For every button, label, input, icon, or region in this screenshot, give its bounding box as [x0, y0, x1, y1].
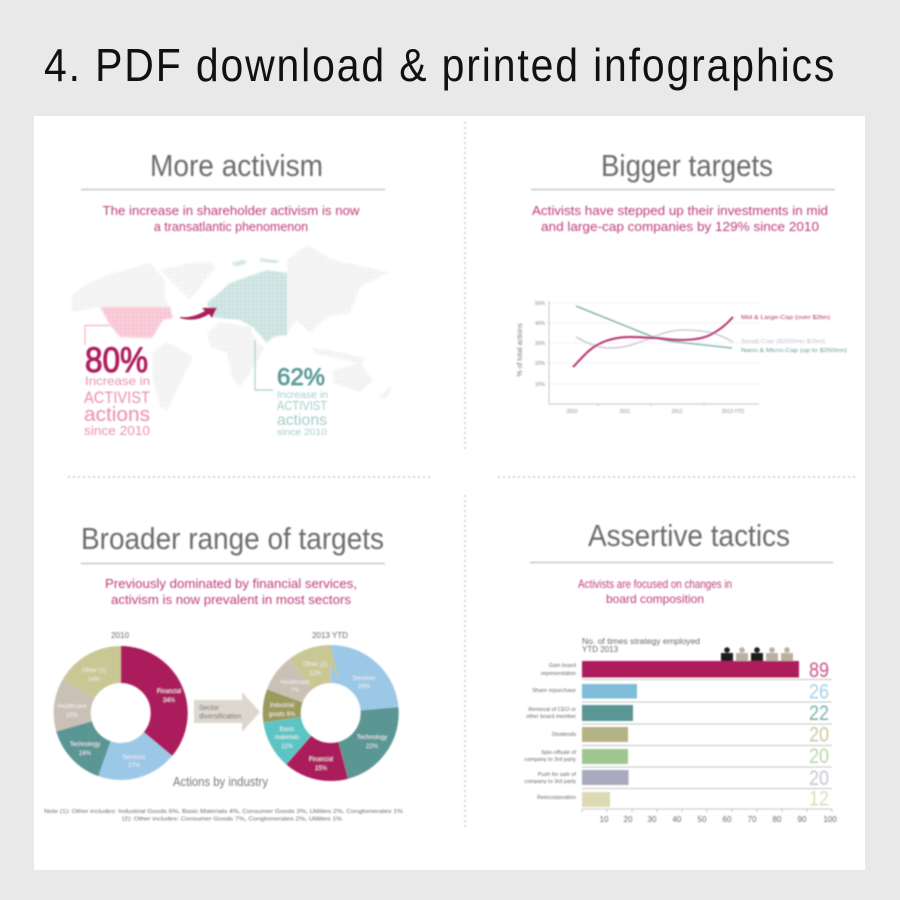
subtitle: assertive tactics: board composition — [606, 592, 704, 606]
x axis labels: 50 — [698, 815, 707, 824]
donut labels: 2013: goods 9% — [269, 712, 296, 718]
panel: bigger targets — [517, 148, 847, 415]
donut labels: 2010: 34% — [163, 698, 176, 704]
values: 12 — [809, 788, 829, 810]
bar: share repurchase — [582, 684, 637, 698]
category labels: company to 3rd party — [524, 757, 576, 763]
stat: 80 percent — [84, 341, 150, 438]
donut labels: 2013 — [269, 662, 387, 772]
x axis labels — [600, 815, 837, 824]
arrow: america to europe — [180, 308, 217, 320]
heading: assertive tactics: Assertive tactics — [588, 518, 790, 553]
heading: broader range of targets: Broader range of targets — [81, 521, 384, 556]
map: europe highlight — [207, 270, 287, 343]
category labels: Reincorporation — [537, 795, 576, 801]
donut labels: 2010: Technology — [70, 742, 100, 748]
values: 20 — [809, 767, 829, 790]
bar: dividends — [582, 727, 628, 742]
donut labels: 2013: Basic — [280, 727, 294, 733]
x axis — [582, 809, 832, 812]
label: 2013 YTD: 2013 YTD — [312, 631, 348, 640]
donut labels: 2013: 7% — [291, 688, 300, 694]
donut labels: 2013: 11% — [281, 744, 293, 750]
connector: europe — [255, 340, 273, 390]
world map — [72, 245, 391, 410]
panel: broader range of targets — [44, 521, 403, 822]
map: north america highlight — [100, 307, 173, 338]
subtitle: broader range: activism is now prevalent in most sectors — [111, 593, 351, 607]
donut labels: 2013: Healthcare — [280, 680, 310, 686]
stat: 62 percent: since 2010 — [277, 427, 327, 437]
x axis labels: 90 — [798, 815, 807, 824]
category labels: Spin-offsale of — [541, 750, 576, 756]
series labels: Nano & Micro-Cap (up to $250mn) — [741, 348, 847, 354]
subtitle: more activism: The increase in shareholder activism is now — [102, 204, 361, 218]
donut labels: 2010: 17% — [128, 763, 141, 769]
category labels: company to 3rd party — [524, 779, 576, 785]
values: 89 — [809, 659, 829, 682]
y axis labels: 30% — [535, 341, 546, 347]
donut labels: 2010: Financial — [157, 689, 181, 695]
stat: 80 percent: Increase in — [85, 374, 150, 388]
bar: spin-offs — [582, 749, 628, 764]
label: 2010: 2010 — [111, 631, 129, 640]
values — [809, 659, 829, 810]
donut labels: 2013: Services — [352, 676, 376, 682]
donut labels: 2013: Industrial — [270, 703, 294, 709]
chart note: YTD 2013 — [582, 645, 619, 654]
values: 20 — [809, 724, 829, 746]
series labels: Small Cap ($250mn-$2bn) — [741, 339, 825, 345]
series: nano and micro cap — [576, 306, 732, 348]
footnote: (2): Other includes: Consumer Goods 7%, Conglomerates 2%, Utilities 1% — [122, 816, 342, 822]
bar: removal of CEO — [582, 705, 633, 721]
donut labels: 2010: Healthcare — [57, 704, 87, 710]
category labels: Gain board — [549, 663, 576, 669]
subtitle: bigger targets: Activists have stepped up their investments in mid — [532, 204, 828, 218]
donut labels: 2010: 14% — [88, 677, 101, 683]
category labels — [524, 663, 576, 801]
arrow: sector diversification: diversification — [199, 714, 242, 720]
white report sheet — [34, 116, 865, 870]
donut labels: 2010: 15% — [66, 713, 79, 719]
stat: 80 percent: since 2010 — [84, 423, 150, 438]
x axis labels: 2010 — [566, 409, 578, 415]
bar: gain board representation — [582, 661, 799, 678]
donut labels: 2013: 22% — [366, 744, 379, 750]
values: 20 — [809, 745, 829, 768]
stat: 62 percent: ACTIVIST — [277, 399, 327, 413]
icons: people — [721, 647, 793, 662]
stat: 62 percent — [277, 364, 328, 437]
x axis labels: 20 — [624, 815, 633, 824]
x axis labels: 100 — [823, 815, 837, 824]
arrow: sector diversification: Sector — [199, 705, 220, 712]
series labels — [741, 315, 847, 354]
chart note: No. of times strategy employed — [582, 637, 700, 646]
donut labels: 2013: materials — [275, 735, 299, 741]
donut labels: 2010 — [57, 668, 181, 769]
y axis labels: 10% — [535, 382, 546, 388]
line chart — [517, 301, 847, 415]
y axis labels: 20% — [535, 361, 546, 367]
donut labels: 2013: 24% — [358, 684, 371, 690]
x axis labels: 10 — [600, 815, 609, 824]
category labels: representation — [541, 671, 576, 677]
y axis title: % of total actions — [517, 323, 524, 377]
category labels: Dividends — [552, 732, 576, 738]
bar: reincorporation — [582, 792, 610, 807]
stat: 80 percent: actions — [84, 404, 150, 426]
heading: more activism: More activism — [150, 148, 323, 183]
values: 22 — [809, 702, 829, 725]
y axis labels: 40% — [535, 321, 546, 327]
x axis labels: 60 — [723, 815, 732, 824]
donut labels: 2013: 12% — [309, 671, 322, 677]
series: mid and large cap — [573, 317, 733, 367]
stat: 80 percent: 80% — [85, 341, 148, 380]
subtitle: more activism: a transatlantic phenomenon — [154, 220, 308, 234]
donut labels: 2013: Technology — [357, 735, 387, 741]
stat: 62 percent: actions — [277, 412, 327, 429]
category labels: other board member — [526, 714, 576, 720]
caption: actions by industry: Actions by industry — [173, 775, 269, 789]
y axis labels: 50% — [535, 301, 546, 307]
category labels: Push for sale of — [538, 772, 576, 778]
donut labels: 2010: 24% — [79, 751, 92, 757]
x axis labels: 70 — [748, 815, 757, 824]
series labels: Mid & Large-Cap (over $2bn) — [741, 315, 830, 321]
donut: 2013 YTD — [269, 662, 387, 772]
donut: 2010 — [57, 664, 181, 769]
stat: 62 percent: 62% — [277, 364, 325, 391]
bar chart — [524, 659, 837, 824]
x axis labels — [566, 409, 745, 415]
values: 26 — [809, 680, 829, 704]
donut labels: 2010: Other (1) — [82, 668, 106, 674]
subtitle: assertive tactics: Activists are focused on changes in — [578, 577, 732, 591]
y axis labels — [535, 301, 546, 388]
heading: bigger targets: Bigger targets — [601, 148, 773, 183]
arrow: sector diversification — [194, 692, 260, 732]
series: small cap — [576, 330, 733, 348]
footnote: Note (1): Other includes: Industrial Goods 6%, Basic Materials 4%, Consumer Goods 3%, Utilities 2%, Conglomerates 1% — [44, 809, 403, 815]
connector: america — [85, 326, 110, 345]
x axis labels: 2013 YTD — [722, 409, 745, 415]
title: 4. PDF download & printed infographics — [44, 41, 834, 92]
donut labels: 2013: 15% — [315, 766, 328, 772]
subtitle: broader range: Previously dominated by financial services, — [105, 577, 357, 591]
stat: 62 percent: Increase in — [277, 390, 328, 401]
subtitle: bigger targets: and large-cap companies by 129% since 2010 — [541, 220, 819, 234]
donut labels: 2013: Financial — [309, 757, 333, 763]
x axis labels: 2012 — [671, 409, 683, 415]
x axis labels: 2011 — [620, 409, 631, 415]
stat: 80 percent: ACTIVIST — [84, 389, 150, 407]
x axis labels: 30 — [648, 815, 657, 824]
x axis labels: 80 — [773, 815, 782, 824]
donut labels: 2010: Services — [122, 755, 146, 761]
category labels: Share repurchase — [532, 688, 576, 694]
donut labels: 2013: Other (2) — [303, 662, 327, 668]
panel: more activism — [72, 148, 391, 438]
bar: push for sale — [582, 770, 628, 785]
category labels: Removal of CEO or — [528, 707, 576, 713]
x axis labels: 40 — [673, 815, 682, 824]
panel: assertive tactics — [524, 518, 837, 824]
